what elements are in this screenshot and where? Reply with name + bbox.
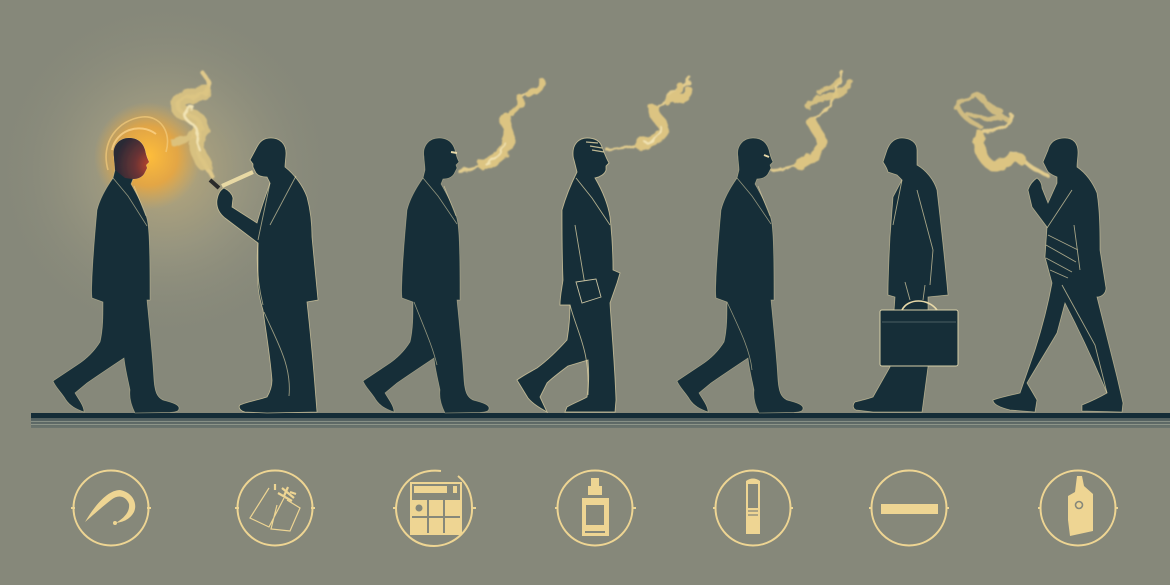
figure 2: man lighting a cigar: [210, 138, 318, 413]
icon: grid panel: [393, 471, 476, 546]
icon: e-liquid bottle: [555, 470, 636, 546]
orange glow: [94, 102, 202, 210]
smoke 7: [956, 96, 1048, 176]
tablet: [576, 279, 601, 303]
figure 7: man vaping while walking: [993, 138, 1123, 412]
icon row: [71, 470, 1118, 546]
figure 5: walking man exhaling: [677, 138, 803, 413]
figure 1: walking man with glowing head: [53, 138, 179, 413]
smoke 5: [772, 72, 850, 170]
smoke plumes: [175, 72, 1048, 176]
icon: paper tags: [235, 470, 315, 546]
smoke 3: [459, 80, 543, 171]
warm halo: [0, 0, 340, 345]
icon: cigarette: [869, 470, 949, 546]
figure 4: walking man with tablet: [517, 138, 620, 412]
figure 6: man with briefcase: [853, 138, 958, 412]
icon: vape mod: [1038, 470, 1118, 546]
icon: hook pipe: [71, 470, 151, 546]
figure 3: walking man exhaling: [363, 138, 489, 413]
head glow: [114, 138, 149, 179]
ground line: [31, 413, 1170, 428]
smoke 4: [607, 78, 690, 150]
cigar: [222, 172, 253, 186]
smoke 1: [175, 72, 212, 176]
briefcase: [880, 301, 958, 366]
icon: vape pen: [713, 470, 793, 546]
